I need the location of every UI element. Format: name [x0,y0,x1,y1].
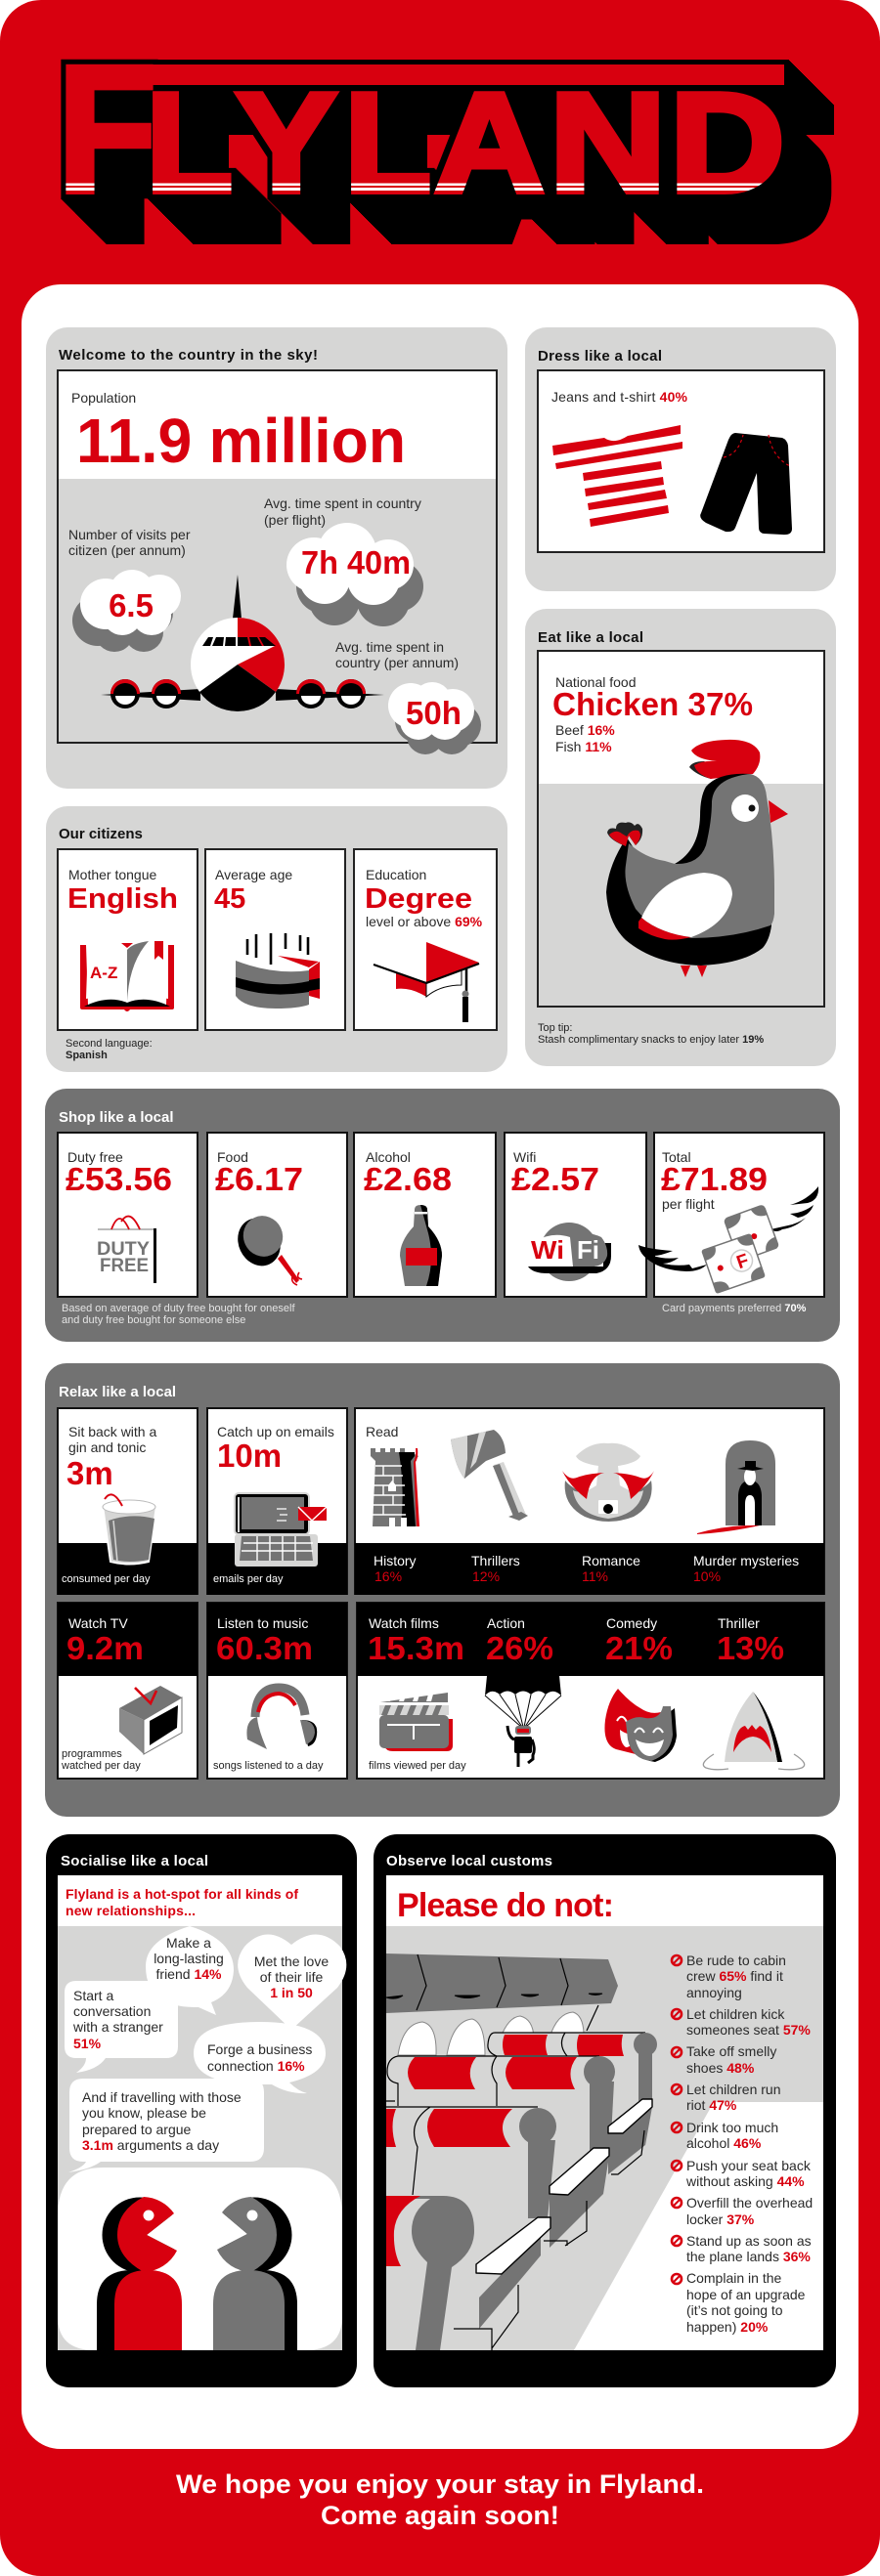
footnote: duty free: Based on average of duty free bought for oneself [62,1303,295,1314]
item: stand up [672,2233,812,2264]
bubble: friend: long-lasting [154,1951,224,1966]
item: upgrade: happen) [686,2319,740,2335]
top tip: Top tip: [538,1022,572,1034]
item: kick seat: someones seat [686,2022,783,2038]
card: duty free: Duty free [67,1149,123,1165]
item: children riot: Let children run [686,2082,781,2097]
card: food [207,1133,347,1297]
panel: dress like a local [525,327,836,591]
bubble: arguments: 3.1m [82,2137,113,2153]
label: avg time per flight: Avg. time spent in country [264,495,421,511]
icon: cake [236,933,320,1009]
values: beef and fish: Beef 16% [555,722,615,738]
large speech backdrop [58,2168,342,2350]
heading: relax: Relax like a local [59,1384,176,1400]
card: mother tongue: English [67,883,178,915]
card: duty free [58,1133,198,1297]
cloud: 50h: 50h [406,695,462,731]
closing message [176,2469,704,2530]
bubble: conversation: conversation [73,2003,151,2019]
white content sheet [22,284,858,2449]
heading: welcome: Welcome to the country in the sky! [59,347,318,364]
value: chicken 37%: Chicken 37% [552,686,753,722]
icon: axe [451,1430,528,1521]
bubble: heart: 1 in 50 [270,1985,313,2000]
icon: chicken leg [230,1210,302,1285]
values: beef and fish: Fish [555,739,585,754]
card: emails: 10m [217,1438,282,1474]
item: alcohol: alcohol [686,2135,733,2151]
heading: eat: Eat like a local [538,629,643,646]
card: read: 11% [582,1568,608,1584]
item: upgrade: (it’s not going to [686,2302,783,2318]
card: watch tv: watched per day [61,1760,141,1772]
bubble: conversation [65,1981,178,2073]
card: watch films [357,1603,824,1779]
item: alcohol: Drink too much [686,2120,778,2135]
icon: winged banknotes: F [734,1250,752,1273]
icon: shark fin [703,1692,805,1770]
values: beef and fish: 11% [585,739,612,754]
card: total [654,1133,824,1297]
card: watch films: 13% [717,1630,784,1666]
item: overhead locker: locker [686,2211,726,2227]
item: overhead locker: 37% [726,2211,755,2227]
bubble: arguments: arguments a day [113,2137,219,2153]
panel: observe local customs [374,1834,836,2387]
card: total: £71.89 [661,1161,768,1197]
item: upgrade [672,2270,806,2335]
stats frame [58,370,497,743]
item: stand up: the plane lands [686,2249,783,2264]
card: watch films: Watch films [369,1615,439,1631]
label: avg time per flight: (per flight) [264,512,326,528]
cloud: visits 6.5 [72,570,181,652]
bubble: heart: Met the love [254,1953,329,1969]
top tip: 19% [742,1034,764,1046]
bubble: arguments [68,2079,264,2172]
icon: wifi cloud: Wi [531,1235,564,1265]
card: education: Degree [365,883,472,915]
heading: socialise: Socialise like a local [61,1853,208,1869]
icon: book: A-Z [90,964,117,982]
card: wifi: Wifi [513,1149,536,1165]
card: food: Food [217,1149,248,1165]
icon: duty free bag: DUTY [97,1239,150,1260]
item: alcohol: 46% [733,2135,762,2151]
card: listen to music: 60.3m [216,1630,313,1666]
panel: eat like a local [525,609,836,1066]
card: watch films: films viewed per day [369,1760,466,1772]
card: read: 12% [472,1568,500,1584]
card: education: Education [366,867,426,882]
icon: bottle [400,1205,442,1286]
card: education [354,849,497,1030]
card: watch films: 15.3m [368,1630,464,1666]
bubble: friend [146,1926,234,2015]
item: rude to crew [672,1953,786,2000]
card: read: History [374,1553,417,1568]
card: average age: Average age [215,867,292,882]
title: Flyland logo [58,29,785,231]
item: children riot: riot [686,2097,709,2113]
item: smelly shoes [672,2043,776,2076]
item: kick seat: Let children kick [686,2006,784,2022]
card: mother tongue [58,849,198,1030]
card: listen to music [207,1603,347,1779]
label: visits: Number of visits per [68,527,190,542]
item: alcohol [672,2120,778,2151]
closing message: We hope you enjoy your stay in Flyland. [176,2469,704,2499]
intro text: new relationships... [66,1903,196,1918]
item: smelly shoes: 48% [726,2060,755,2076]
card: gin and tonic: gin and tonic [68,1439,146,1455]
intro text: Flyland is a hot-spot for all kinds of [66,1886,298,1902]
icon: jeans [700,433,792,535]
card: watch films: 26% [486,1630,553,1666]
card: emails: emails per day [213,1573,284,1585]
footnote: duty free: and duty free bought for someone else [62,1314,245,1326]
population value: 11.9 million [76,406,406,476]
card: read: 10% [693,1568,721,1584]
card: average age: 45 [214,883,245,915]
icon: chicken [606,740,788,977]
card: read: Romance [582,1553,640,1568]
bubble: conversation: with a stranger [72,2019,163,2035]
customs frame [386,1875,823,2350]
title: Flyland logo: Y [236,64,336,222]
icon: gin glass [103,1494,156,1564]
second language note: Spanish [66,1050,108,1061]
icon: graduation cap [374,942,479,1022]
icon: winged banknotes [638,1186,818,1293]
item: upgrade: Complain in the [686,2270,781,2286]
panel: relax like a local [45,1363,840,1817]
footnote: card payments: Card payments preferred 70% [662,1303,807,1314]
icon: parachutist [485,1676,561,1767]
card: duty free: £53.56 [66,1161,172,1197]
panel: welcome [46,327,507,789]
icon: duty free bag [97,1217,156,1283]
top tip: Stash complimentary snacks to enjoy later [538,1034,742,1046]
card: watch tv: programmes [62,1748,122,1760]
bubble: arguments: you know, please be [82,2105,206,2121]
item: stand up: 36% [783,2249,811,2264]
icon: theatre masks [604,1689,677,1762]
cloud: visits 6.5: 6.5 [109,587,154,623]
item: seat back: without asking [685,2173,777,2189]
icon: wifi cloud: Fi [577,1235,599,1265]
heading: please do not: Please do not: [397,1887,614,1924]
card: watch films: 21% [605,1630,673,1666]
bubble: conversation: Start a [73,1988,113,2003]
icon: duty free bag: FREE [100,1256,149,1276]
card: education: level or above 69% [366,914,483,929]
bubble: business: Forge a business [207,2041,312,2057]
card: food: £6.17 [215,1161,303,1197]
bubble: business [194,2022,326,2093]
illustration: cabin seats [386,1953,657,2350]
icon: television [119,1686,182,1754]
card: listen to music: songs listened to a day [213,1760,324,1772]
population label: Population [71,390,136,406]
label: jeans and t-shirt: Jeans and t-shirt 40% [551,389,688,405]
label: national food: National food [555,674,637,690]
title: Flyland logo: N [550,64,667,222]
item: smelly shoes: Take off smelly [686,2043,776,2059]
figure: red person [97,2197,191,2350]
title: Flyland logo: L [344,64,431,222]
card: listen to music: Listen to music [217,1615,308,1631]
item: rude to crew: annoying [686,1985,742,2000]
heading: customs: Observe local customs [386,1853,552,1869]
intro text [66,1886,298,1918]
bubble: business: connection [207,2058,278,2074]
panel: shop like a local [45,1089,840,1342]
bubble: heart: of their life [260,1969,324,1985]
icon: castle tower [371,1448,419,1526]
item: children riot: 47% [709,2097,737,2113]
icon: plane [101,575,384,711]
item: overhead locker [672,2195,813,2227]
closing message: Come again soon! [321,2501,559,2530]
item: upgrade: hope of an upgrade [686,2287,806,2302]
card: gin and tonic [58,1408,198,1595]
heading: dress: Dress like a local [538,348,662,365]
cloud: 50h [388,682,481,754]
card: watch tv: 9.2m [66,1630,144,1666]
item: rude to crew: Be rude to cabin [686,1953,786,1968]
bubble: heart [238,1934,346,2030]
bubble: business: 16% [278,2058,305,2074]
label: avg time per annum: Avg. time spent in [335,639,444,655]
item: stand up: Stand up as soon as [686,2233,812,2249]
card: gin and tonic: consumed per day [62,1573,151,1585]
title: Flyland logo: D [670,64,785,222]
item: children riot [672,2082,781,2113]
card: gin and tonic: 3m [66,1455,113,1491]
social frame [58,1875,342,2350]
card: wifi: £2.57 [511,1161,599,1197]
card: average age [205,849,345,1030]
item: smelly shoes: shoes [686,2060,726,2076]
bubble: arguments: prepared to argue [82,2122,192,2137]
heading: shop: Shop like a local [59,1109,174,1126]
figure: grey person [203,2197,297,2350]
item: upgrade: 20% [740,2319,769,2335]
bubble: friend: Make a [166,1935,211,1951]
icon: wifi cloud [527,1223,611,1281]
card: watch films: Thriller [718,1615,760,1631]
card: read: Murder mysteries [693,1553,799,1568]
icon: murder door [697,1440,775,1534]
title: Flyland logo: F [58,29,156,231]
card: total: Total [662,1149,691,1165]
item: kick seat: 57% [783,2022,811,2038]
card: watch tv: Watch TV [68,1615,128,1631]
panel: socialise like a local [46,1834,357,2387]
icon: headphones [246,1688,317,1749]
item: seat back: Push your seat back [686,2158,811,2173]
card: watch films: Comedy [606,1615,657,1631]
bubble: conversation: 51% [73,2036,102,2051]
eat frame [538,651,824,1007]
card: emails: Catch up on emails [217,1424,334,1439]
list of do nots [672,1953,813,2335]
item: seat back: 44% [777,2173,805,2189]
card: watch films: Action [487,1615,525,1631]
bubble: friend: 14% [194,1966,222,1982]
icon: striped t-shirt [552,425,682,527]
item: rude to crew: crew [686,1968,719,1984]
cloud: 7h 40m [286,523,423,626]
item: seat back [672,2158,812,2189]
card: wifi [505,1133,646,1297]
item: rude to crew: 65% find it [719,1968,783,1984]
label: visits: citizen (per annum) [68,542,186,558]
title: Flyland logo: L [146,64,233,222]
heading: citizens: Our citizens [59,826,143,842]
card: gin and tonic: Sit back with a [68,1424,156,1439]
icon: romance face [562,1443,654,1522]
panel: our citizens [46,806,507,1072]
bubble: arguments: And if travelling with those [82,2089,242,2105]
card: read: 16% [374,1568,402,1584]
card: watch tv [58,1603,198,1779]
cloud: 7h 40m: 7h 40m [301,544,411,580]
icon: laptop with envelope [235,1493,327,1567]
card: emails [207,1408,347,1595]
footnote: duty free [62,1303,295,1326]
title: Flyland logo: A [434,64,545,222]
card: mother tongue: Mother tongue [68,867,156,882]
item: overhead locker: Overfill the overhead [686,2195,813,2211]
item: kick seat [672,2006,811,2038]
card: alcohol: Alcohol [366,1149,411,1165]
card: alcohol: £2.68 [364,1161,452,1197]
icon: book [80,941,174,1011]
bubble: friend: friend [156,1966,194,1982]
card: read [355,1408,824,1595]
card: read: Thrillers [471,1553,520,1568]
card: alcohol [354,1133,496,1297]
dress frame [538,370,824,552]
icon: clapperboard [379,1691,453,1751]
second language note: Second language: [66,1038,153,1050]
label: avg time per annum: country (per annum) [335,655,459,670]
card: read: Read [366,1424,398,1439]
card: total: per flight [662,1196,715,1212]
